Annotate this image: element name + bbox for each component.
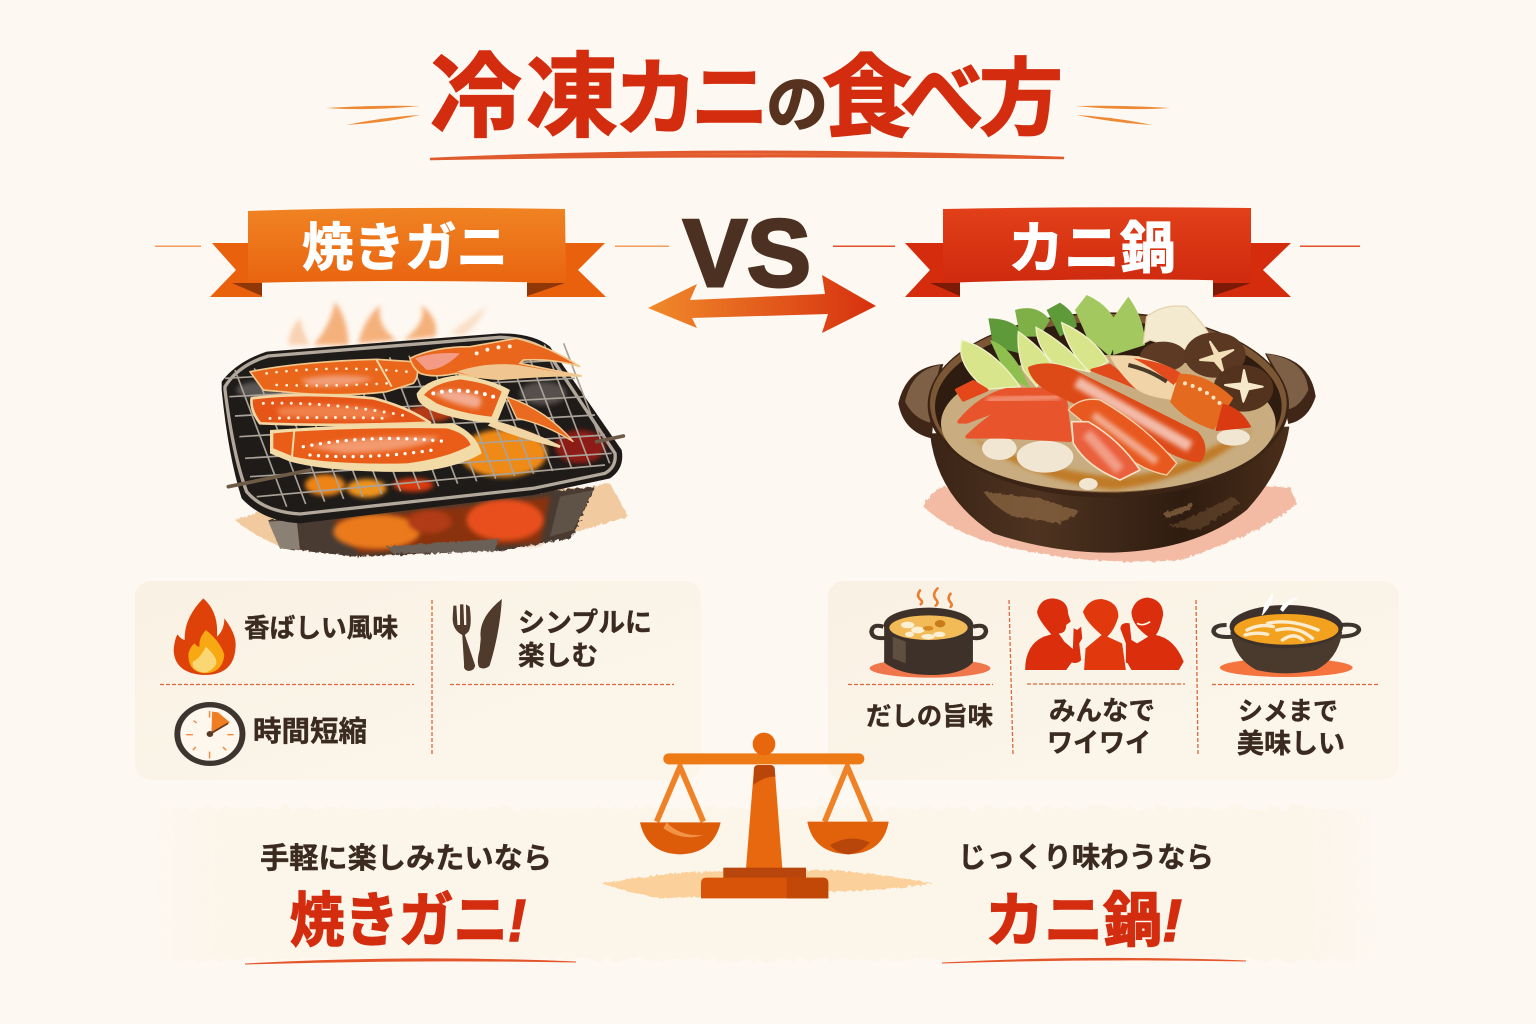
text: カニ鍋！: カニ鍋! [985, 888, 1182, 954]
crab leg middle [251, 395, 430, 425]
ground wash [235, 483, 628, 557]
text: シメまで美味しい: シメまで [1238, 698, 1338, 726]
scale beam [663, 753, 864, 764]
title: 冷 [430, 47, 522, 149]
text: だしの旨味: だしの旨味 [866, 703, 993, 731]
scale pillar [746, 765, 782, 868]
title: 食 [822, 49, 912, 149]
icon: noodle finish pot [1214, 594, 1359, 677]
icon: three friends talking [1025, 598, 1184, 670]
ribbon side lines left [155, 246, 669, 247]
text: みんなでワイワイ: みんなで [1049, 696, 1155, 726]
panel: crab hotpot features [828, 581, 1399, 780]
text: 香ばしい風味: 香ばしい風味 [244, 613, 398, 643]
icon: clock [177, 705, 242, 763]
crab claw top right [410, 338, 582, 379]
leaves [988, 295, 1145, 388]
title side strokes right [1076, 106, 1170, 125]
citrus vegetable wedges [961, 323, 1108, 389]
text: left recommendation lead: 手軽に楽しみたいなら [260, 842, 552, 875]
scale pivot ball [753, 733, 775, 755]
pot body [930, 427, 1289, 553]
handle right [1265, 353, 1316, 424]
ribbon: grilled crab [210, 208, 606, 297]
wire grid [225, 343, 612, 507]
title: カ [614, 52, 698, 146]
text: シメまで美味しい [1237, 698, 1345, 759]
crab leg top left [250, 359, 417, 395]
underline right [942, 958, 1246, 963]
dashed dividers [160, 600, 674, 755]
text: みんなでワイワイ [1047, 696, 1155, 758]
hot coals [237, 382, 605, 498]
text: 焼きガニ！: 焼きガニ! [290, 888, 526, 954]
broth [941, 355, 1276, 492]
text: 時間短縮: 時間短縮 [253, 716, 367, 748]
dashed dividers [848, 600, 1378, 755]
panel: grilled crab features [135, 581, 701, 780]
underline left [245, 959, 576, 964]
ribbon text: 焼きガニ: 焼きガニ [302, 220, 508, 278]
scale pans [640, 822, 889, 854]
icon: flame [174, 598, 236, 675]
title: ニ [691, 54, 769, 142]
charcoal box [268, 487, 595, 557]
title side strokes left [326, 106, 420, 125]
text: シンプルに楽しむ [518, 608, 652, 671]
grill frame [222, 333, 622, 523]
text: みんなでワイワイ: ワイワイ [1047, 728, 1151, 758]
illustration: grilled crab over charcoal [222, 302, 628, 557]
title: 方 [979, 52, 1063, 146]
ribbon side lines right [833, 246, 1360, 247]
icon: dashi pot with steam [870, 588, 990, 678]
text: right recommendation lead: じっくり味わうなら [958, 842, 1214, 874]
illustration: crab hotpot [898, 295, 1316, 562]
tofu [1143, 306, 1208, 350]
title: べ [900, 52, 984, 146]
double arrow [648, 275, 876, 333]
wash under pot [923, 487, 1297, 562]
text: シンプルに楽しむ: 楽しむ [518, 641, 598, 671]
pot rim [928, 312, 1289, 498]
ribbon: crab hotpot [905, 207, 1291, 297]
scale ground wash [602, 870, 933, 898]
icon: balance scale [602, 733, 933, 898]
crab leg front [270, 423, 482, 472]
ribbon text: カニ鍋: カニ鍋 [1008, 217, 1176, 280]
pot glaze marks [983, 492, 1240, 530]
conclusion band [150, 808, 1380, 964]
title [430, 47, 1063, 149]
crab legs [957, 355, 1250, 480]
title: 凍 [526, 47, 618, 149]
scale pan strings [657, 767, 871, 822]
shiitake mushrooms [1140, 332, 1273, 412]
scale base [701, 868, 828, 898]
shellfish and scallops [982, 429, 1250, 490]
title underline [430, 152, 1064, 159]
handle left [898, 364, 943, 438]
title: の [766, 71, 828, 140]
text: シメまで美味しい: 美味しい [1237, 729, 1345, 759]
handles [228, 436, 623, 487]
flames above grill [288, 302, 487, 345]
crab claw right middle [417, 375, 573, 447]
text: シンプルに楽しむ: シンプルに [518, 608, 652, 638]
VS label: VS [683, 200, 811, 307]
icon: fork and knife [453, 599, 502, 671]
